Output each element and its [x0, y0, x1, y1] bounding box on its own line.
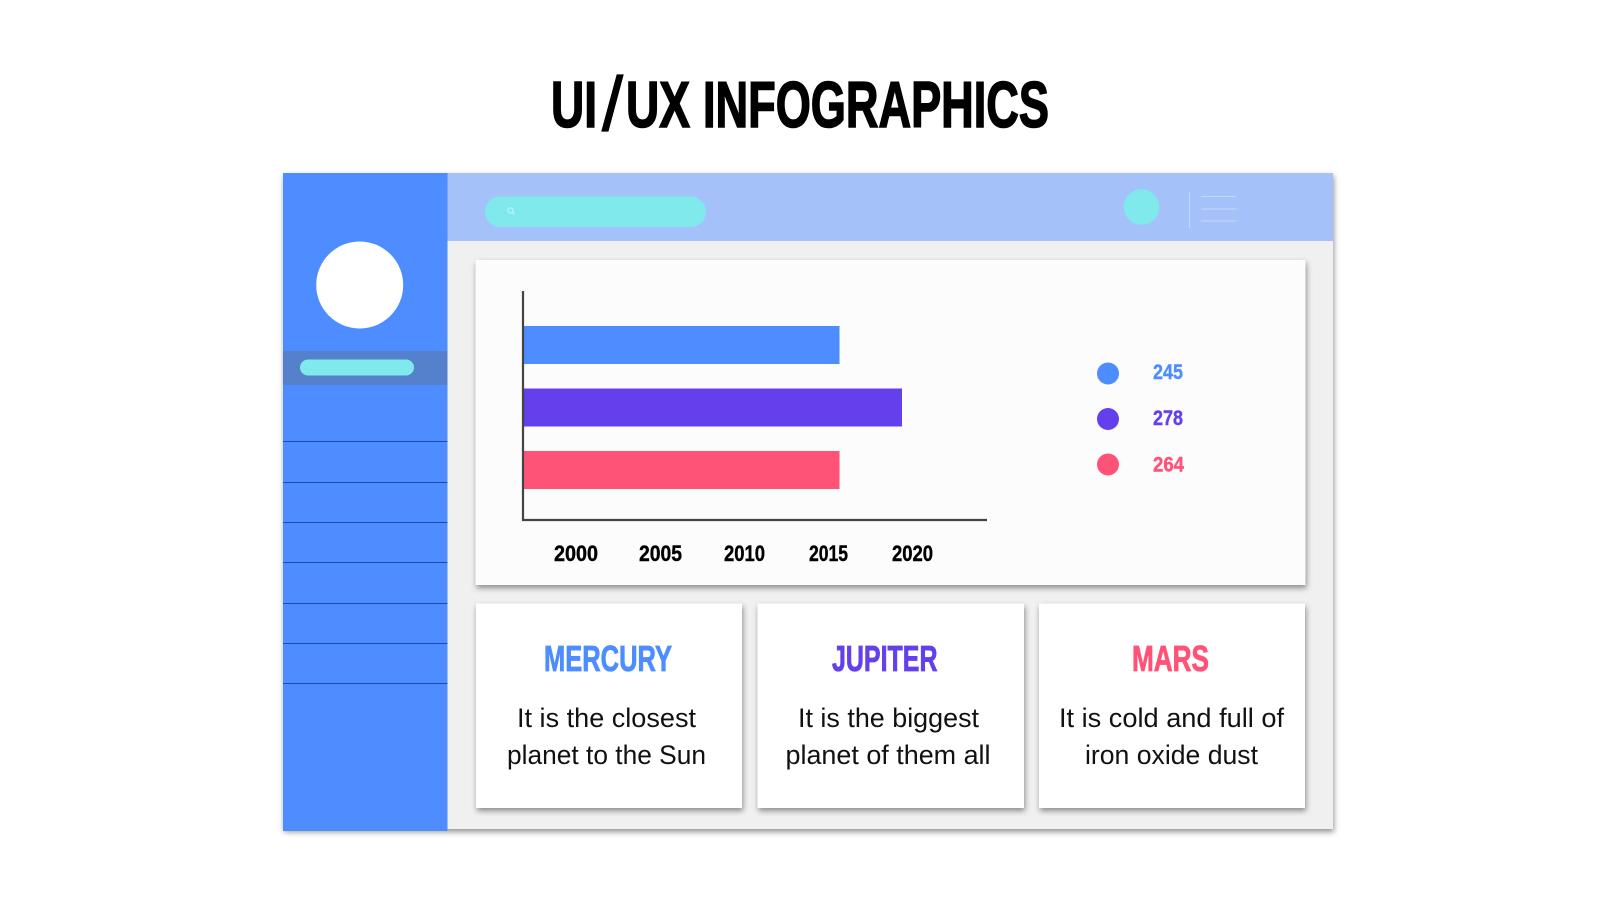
legend	[1097, 361, 1184, 476]
heading: Mars: MARS	[1132, 638, 1209, 679]
chart axes	[523, 291, 987, 520]
search field	[485, 196, 706, 227]
legend: 245	[1153, 361, 1183, 384]
text: Jupiter description	[786, 703, 990, 770]
text: Mars description	[1059, 703, 1284, 770]
panel: app window	[283, 173, 1333, 831]
panel: window background	[283, 173, 1333, 829]
bar: purple	[524, 388, 902, 426]
icon: hamburger menu	[1190, 192, 1236, 228]
axis labels: 2000	[554, 541, 598, 566]
legend: 278	[1153, 407, 1183, 430]
title: UX	[626, 68, 690, 141]
heading: Jupiter: JUPITER	[832, 638, 938, 679]
text: Jupiter description: It is the biggest	[798, 703, 979, 733]
active menu item	[283, 351, 448, 385]
text: Jupiter description: planet of them all	[786, 740, 990, 770]
title: UI	[551, 68, 597, 141]
icon: magnifier	[508, 208, 514, 214]
bar: blue	[524, 326, 840, 364]
panel: chart card	[476, 260, 1306, 585]
panel: Mercury card	[476, 604, 742, 808]
axis labels: 2020	[892, 541, 933, 566]
panel: sidebar	[283, 173, 448, 831]
bar: pink	[524, 451, 840, 489]
icon: notification dot	[1124, 189, 1159, 225]
axis labels: 2005	[639, 541, 682, 566]
bar chart	[523, 291, 987, 566]
text: Mercury description	[507, 703, 706, 770]
legend: 264	[1153, 454, 1184, 476]
title	[551, 62, 1049, 147]
text: Mercury description: planet to the Sun	[507, 740, 706, 770]
panel: Jupiter card	[758, 604, 1024, 808]
axis labels: 2015	[809, 541, 848, 566]
text: Mars description: iron oxide dust	[1085, 740, 1258, 770]
heading: Mercury: MERCURY	[544, 638, 672, 679]
title: INFOGRAPHICS	[703, 68, 1049, 141]
title: /	[602, 62, 624, 147]
panel: Mars card	[1039, 604, 1305, 808]
axis labels: 2010	[724, 541, 765, 566]
text: Mercury description: It is the closest	[517, 703, 696, 733]
axis labels	[554, 541, 933, 566]
sidebar menu dividers	[283, 442, 448, 684]
panel: top bar	[447, 173, 1333, 241]
avatar	[316, 242, 403, 328]
text: Mars description: It is cold and full of	[1059, 703, 1284, 733]
